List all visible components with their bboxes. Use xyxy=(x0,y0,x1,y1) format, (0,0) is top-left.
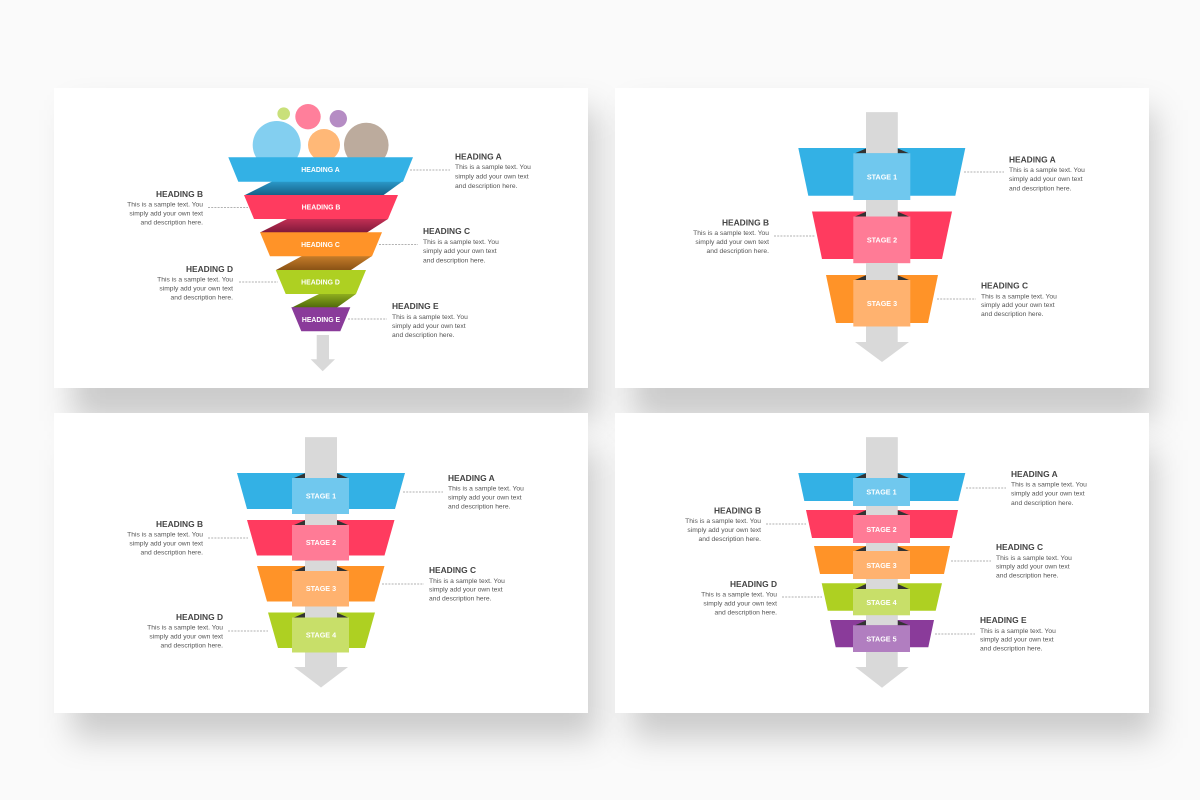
label: heading E xyxy=(348,301,468,339)
stage 3: STAGE 3 xyxy=(867,299,897,308)
label: heading B xyxy=(127,519,248,556)
label: heading B: HEADING B xyxy=(156,189,203,199)
arrow: down xyxy=(311,335,335,371)
label: heading C: This is a sample text. You xyxy=(996,555,1072,562)
label: heading D: HEADING D xyxy=(186,264,233,274)
stage 3 xyxy=(814,543,950,579)
funnel level E: HEADING E xyxy=(302,317,341,324)
label: heading C: simply add your own text xyxy=(429,586,503,594)
panel: three-stage funnel xyxy=(615,88,1149,388)
label: heading A xyxy=(410,152,531,190)
label: heading B: HEADING B xyxy=(156,519,203,529)
label: heading E: and description here. xyxy=(392,332,455,339)
label: heading B: This is a sample text. You xyxy=(693,230,769,237)
stage 2 xyxy=(247,514,394,560)
stage 3: STAGE 3 xyxy=(306,584,336,593)
panel: five-stage funnel xyxy=(615,413,1149,713)
stage 2: STAGE 2 xyxy=(867,236,897,244)
label: heading D: simply add your own text xyxy=(149,634,223,640)
label: heading D: This is a sample text. You xyxy=(157,276,233,284)
label: heading C: This is a sample text. You xyxy=(429,578,505,585)
label: heading B: HEADING B xyxy=(722,218,769,228)
label: heading D xyxy=(701,579,822,616)
arrow: vertical shaft xyxy=(855,437,909,688)
stage 1 xyxy=(237,437,405,514)
label: heading D xyxy=(157,264,278,302)
label: heading B: simply add your own text xyxy=(695,239,769,246)
label: heading C xyxy=(951,542,1072,580)
label: heading B xyxy=(693,218,815,255)
label: heading C: and description here. xyxy=(423,258,486,264)
label: heading E: simply add your own text xyxy=(392,323,466,330)
label: heading A: simply add your own text xyxy=(448,494,522,502)
label: heading E: HEADING E xyxy=(392,301,439,311)
stage 3: STAGE 3 xyxy=(866,561,897,570)
label: heading D: This is a sample text. You xyxy=(147,624,223,632)
label: heading C xyxy=(382,565,505,602)
label: heading A: This is a sample text. You xyxy=(455,164,531,171)
label: heading B: HEADING B xyxy=(714,506,761,516)
stage 3 xyxy=(826,263,938,326)
label: heading E xyxy=(935,615,1056,652)
stage 5: STAGE 5 xyxy=(866,634,897,644)
funnel level C xyxy=(260,232,382,256)
label: heading C: HEADING C xyxy=(423,226,470,236)
stage 2: STAGE 2 xyxy=(306,538,336,547)
label: heading A: and description here. xyxy=(1009,186,1072,192)
stage 1 xyxy=(798,437,965,506)
funnel level C: HEADING C xyxy=(301,242,340,249)
label: heading C: simply add your own text xyxy=(981,302,1055,309)
stage 4: STAGE 4 xyxy=(306,630,336,640)
label: heading A: HEADING A xyxy=(455,152,502,162)
label: heading D: HEADING D xyxy=(730,579,777,589)
label: heading E: HEADING E xyxy=(980,615,1027,625)
label: heading A xyxy=(964,154,1085,192)
label: heading B xyxy=(127,189,248,226)
label: heading B: This is a sample text. You xyxy=(685,518,761,525)
label: heading C: and description here. xyxy=(996,572,1059,580)
panel: four-stage funnel xyxy=(54,413,588,713)
label: heading A: This is a sample text. You xyxy=(1011,482,1087,488)
label: heading C: This is a sample text. You xyxy=(981,294,1057,300)
label: heading A: and description here. xyxy=(448,504,511,510)
label: heading A: and description here. xyxy=(1011,500,1074,507)
label: heading D: simply add your own text xyxy=(159,286,233,292)
stage 2 xyxy=(812,200,952,263)
label: heading E: This is a sample text. You xyxy=(980,628,1056,635)
funnel level B xyxy=(244,195,398,219)
stage 2 xyxy=(806,506,958,543)
stage 1: STAGE 1 xyxy=(866,488,897,496)
funnel level B: HEADING B xyxy=(302,204,340,212)
label: heading B: and description here. xyxy=(699,536,761,543)
label: heading D: and description here. xyxy=(171,294,233,302)
label: heading C: simply add your own text xyxy=(996,564,1070,570)
label: heading A xyxy=(403,473,524,510)
stage 4: STAGE 4 xyxy=(866,598,897,607)
label: heading D: simply add your own text xyxy=(703,600,777,608)
stage 1: STAGE 1 xyxy=(306,492,336,500)
label: heading A: HEADING A xyxy=(1009,154,1056,164)
label: heading A: This is a sample text. You xyxy=(1009,167,1085,174)
stage 4 xyxy=(822,579,942,615)
label: heading C xyxy=(379,226,499,264)
label: heading A: This is a sample text. You xyxy=(448,486,524,492)
label: heading C: HEADING C xyxy=(981,280,1028,290)
label: heading B: and description here. xyxy=(707,248,769,255)
funnel level D xyxy=(276,270,366,294)
stage 1 xyxy=(798,112,965,200)
label: heading C: HEADING C xyxy=(429,565,476,575)
arrow: vertical shaft xyxy=(855,112,909,362)
label: heading D xyxy=(147,612,268,650)
funnel folds xyxy=(244,181,403,308)
stage 2: STAGE 2 xyxy=(866,525,897,534)
icon: circles above funnel xyxy=(252,104,389,158)
arrow: vertical shaft xyxy=(294,437,348,688)
label: heading C: simply add your own text xyxy=(423,248,497,255)
stage 1: STAGE 1 xyxy=(867,172,897,182)
panel: five-level folded funnel xyxy=(54,88,588,388)
label: heading D: This is a sample text. You xyxy=(701,592,777,598)
label: heading C: and description here. xyxy=(429,596,492,602)
label: heading E: and description here. xyxy=(980,646,1043,652)
label: heading D: HEADING D xyxy=(176,612,223,622)
label: heading B: This is a sample text. You xyxy=(127,202,203,208)
label: heading A xyxy=(966,469,1087,507)
label: heading C: This is a sample text. You xyxy=(423,239,499,246)
label: heading A: simply add your own text xyxy=(1009,176,1083,183)
label: heading B: simply add your own text xyxy=(129,540,203,548)
label: heading B xyxy=(685,506,806,543)
label: heading B: simply add your own text xyxy=(687,527,761,534)
funnel level D: HEADING D xyxy=(301,280,340,286)
stage 4 xyxy=(268,606,375,652)
label: heading A: HEADING A xyxy=(1011,469,1058,479)
label: heading C: HEADING C xyxy=(996,542,1043,552)
label: heading B: and description here. xyxy=(141,550,203,556)
label: heading A: and description here. xyxy=(455,183,518,190)
label: heading A: simply add your own text xyxy=(455,174,529,180)
stage 3 xyxy=(257,560,384,606)
label: heading C: and description here. xyxy=(981,311,1044,318)
funnel level A xyxy=(228,157,413,182)
label: heading A: simply add your own text xyxy=(1011,490,1085,498)
stage 5 xyxy=(830,615,934,652)
label: heading C xyxy=(937,280,1057,318)
label: heading E: This is a sample text. You xyxy=(392,314,468,321)
funnel level E xyxy=(291,307,350,331)
label: heading D: and description here. xyxy=(161,642,223,650)
label: heading B: simply add your own text xyxy=(129,210,203,218)
label: heading B: and description here. xyxy=(141,220,203,226)
label: heading E: simply add your own text xyxy=(980,636,1054,644)
label: heading B: This is a sample text. You xyxy=(127,532,203,538)
label: heading D: and description here. xyxy=(715,610,777,616)
funnel level A: HEADING A xyxy=(301,167,340,174)
label: heading A: HEADING A xyxy=(448,473,495,483)
